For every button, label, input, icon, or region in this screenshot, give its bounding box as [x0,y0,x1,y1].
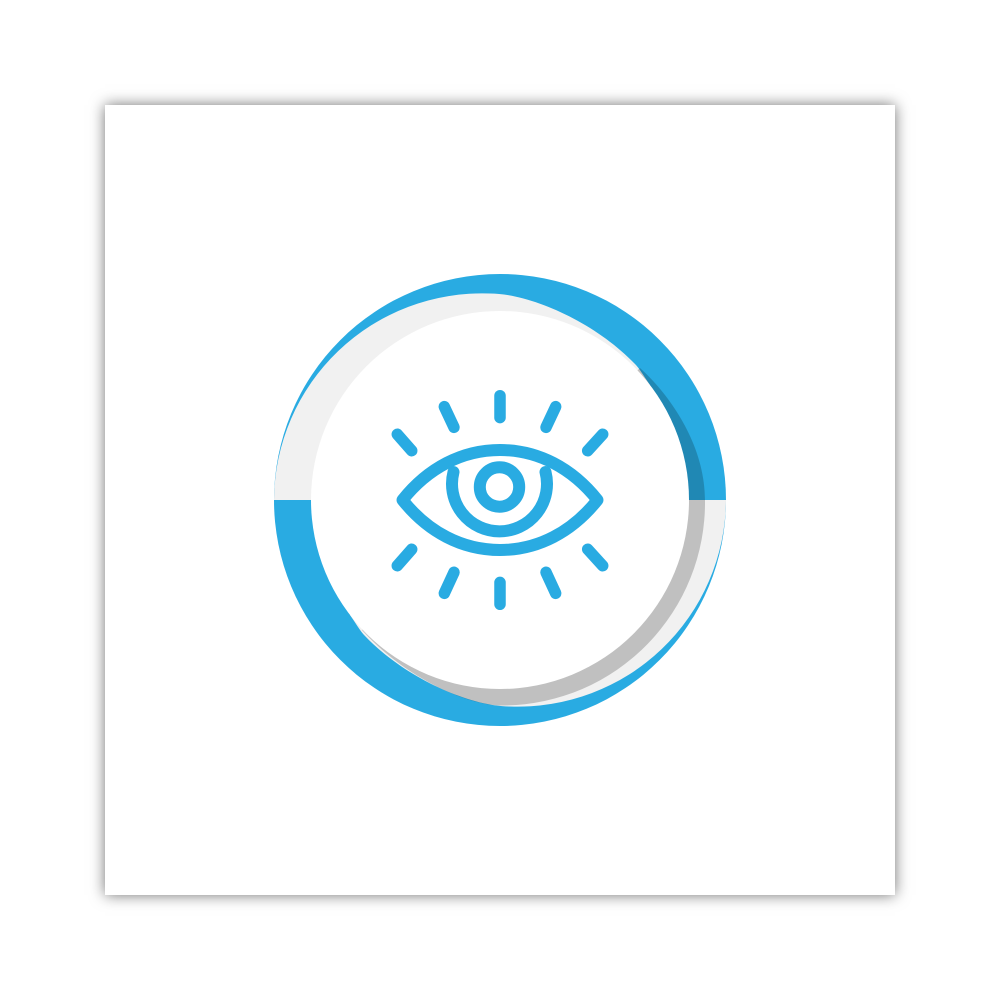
ring: blue outer disc [274,274,726,726]
ring: white centre disc [311,311,689,689]
badge icon [274,274,726,726]
ring: lower light grey segment [350,500,726,707]
rays around eye [397,396,603,604]
panel: white card with drop shadow [105,105,895,895]
ring: upper light grey segment [274,293,650,500]
ring: inner crescent shadow [362,368,705,706]
pupil ring [480,467,519,507]
iris arc [452,472,547,531]
eye outline [402,450,598,550]
icon: eye with rays [397,396,603,604]
